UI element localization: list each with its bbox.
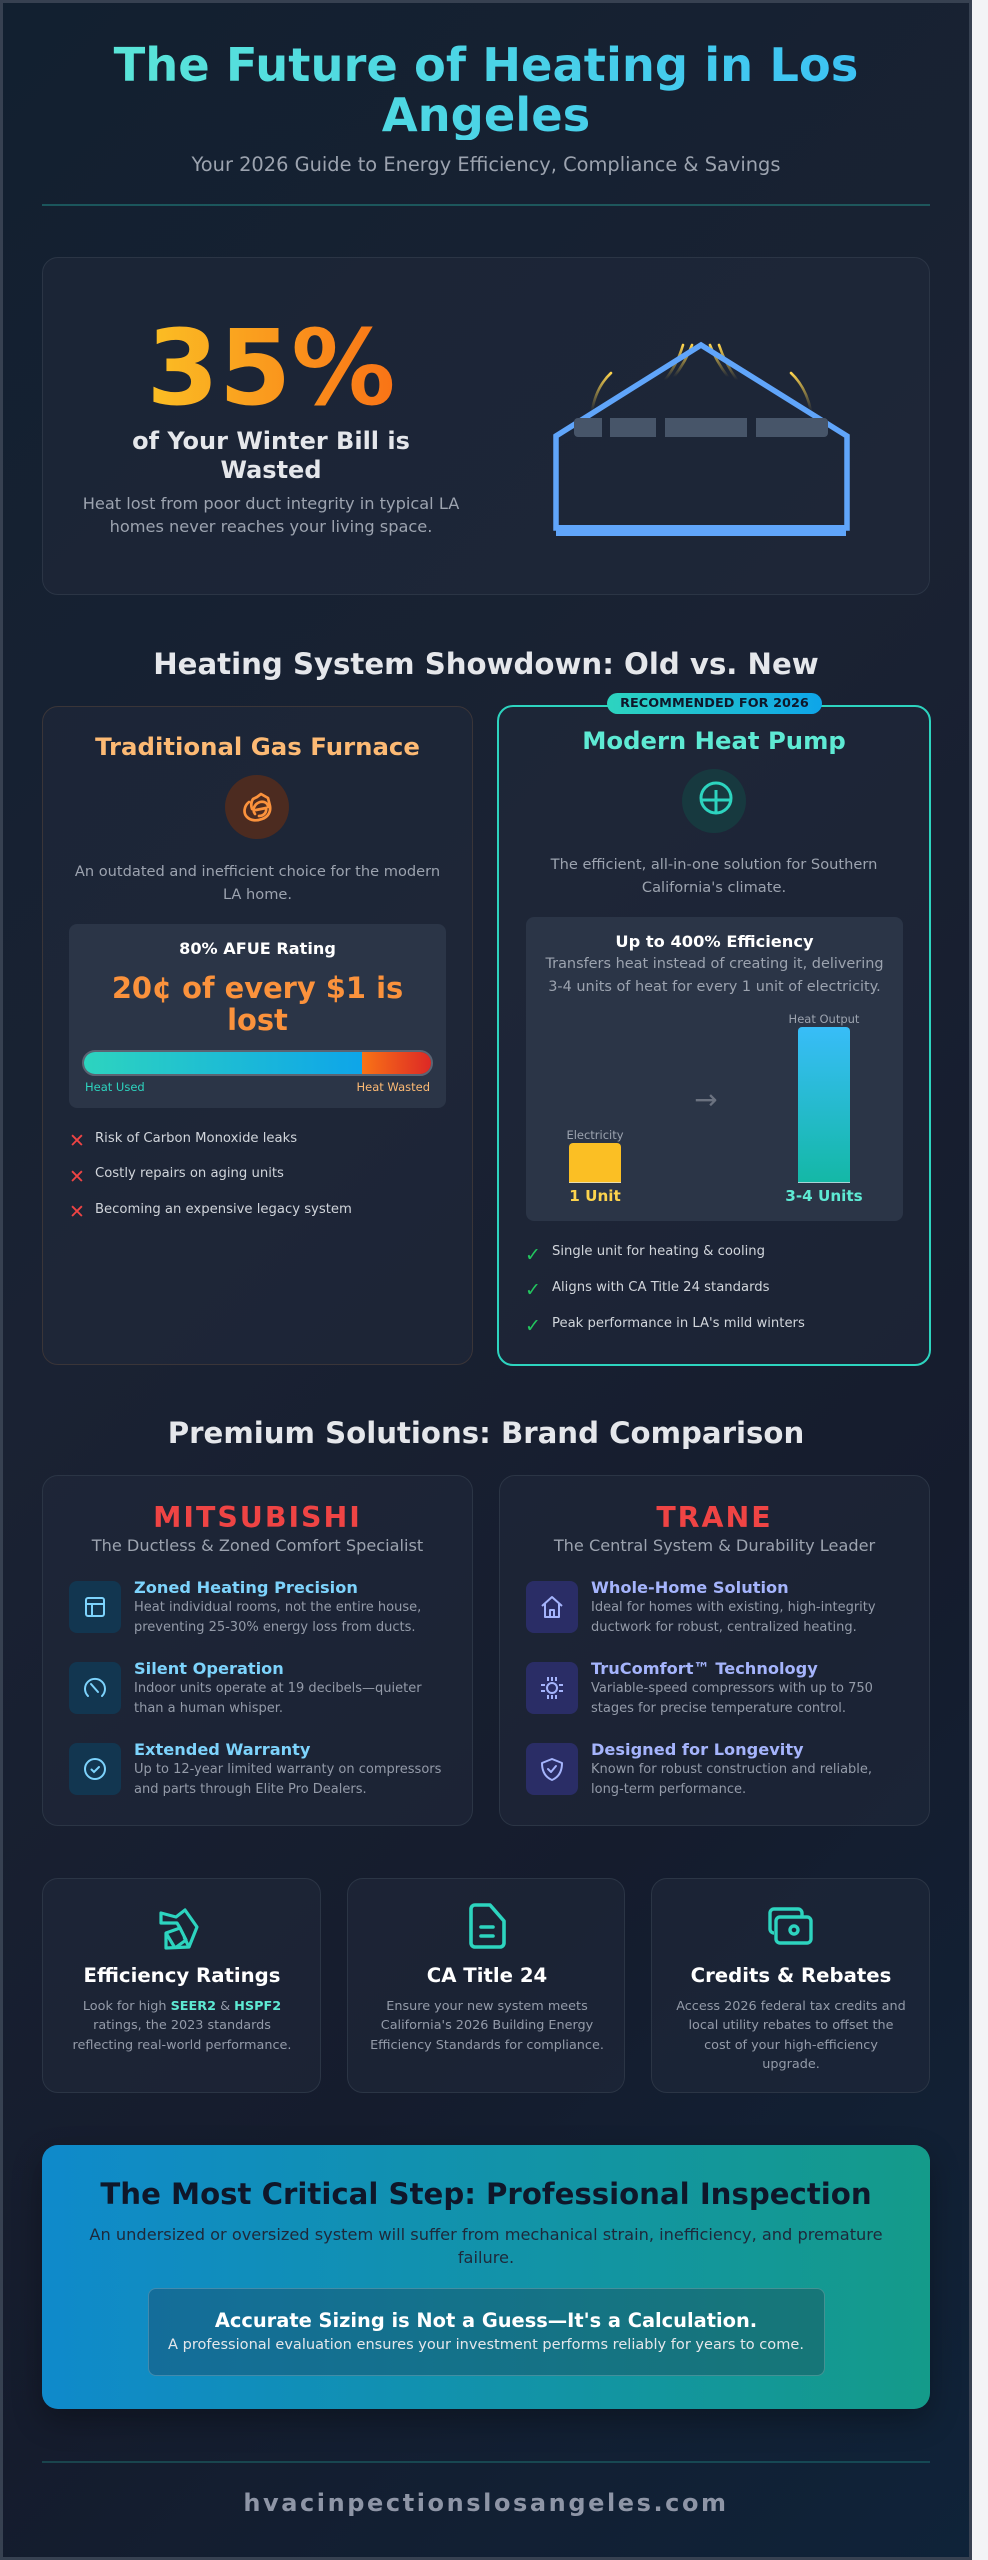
heat wasted segment bbox=[362, 1052, 433, 1074]
bar chart: electricity in vs heat out bbox=[566, 1012, 863, 1205]
drawback 3 text: Becoming an expensive legacy system bbox=[95, 1202, 352, 1216]
feature text bbox=[591, 1600, 876, 1634]
footer URL: hvacinpectionslosangeles.com bbox=[243, 2489, 729, 2517]
feature: extended warranty bbox=[69, 1740, 441, 1796]
loss statement: lost bbox=[227, 1003, 288, 1037]
panel: traditional gas furnace bbox=[42, 706, 473, 1365]
drawback 3: ✕ bbox=[69, 1201, 85, 1223]
feature text: Heat individual rooms, not the entire house, bbox=[134, 1600, 421, 1615]
icon: document bbox=[469, 1903, 506, 1949]
efficiency heading: Up to 400% Efficiency bbox=[615, 932, 814, 951]
electricity bar bbox=[569, 1142, 621, 1182]
brand tagline: The Central System & Durability Leader bbox=[554, 1536, 875, 1555]
feature text: stages for precise temperature control. bbox=[591, 1700, 846, 1716]
feature: TruComfort bbox=[526, 1659, 873, 1716]
panel: modern heat pump bbox=[497, 705, 931, 1366]
feature text: and parts through Elite Pro Dealers. bbox=[134, 1782, 367, 1796]
furnace description bbox=[75, 863, 440, 903]
benefit 2: ✓ bbox=[525, 1279, 541, 1301]
icon: flame bbox=[225, 775, 289, 839]
icon: star ticket bbox=[159, 1908, 199, 1950]
heat output value: 3-4 Units bbox=[785, 1187, 863, 1205]
feature text bbox=[591, 1681, 873, 1716]
furnace description: An outdated and inefficient choice for the modern bbox=[75, 863, 440, 880]
heat pump description: The efficient, all-in-one solution for Southern bbox=[551, 856, 877, 873]
icon: banknotes bbox=[768, 1907, 813, 1945]
card title: CA Title 24 bbox=[427, 1964, 547, 1987]
feature text: Ideal for homes with existing, high-integrity bbox=[591, 1600, 876, 1615]
efficiency panel bbox=[526, 917, 903, 1221]
header bbox=[42, 38, 930, 206]
CTA text: failure. bbox=[458, 2248, 514, 2266]
icon: gauge bbox=[69, 1662, 121, 1714]
footer divider bbox=[42, 2461, 930, 2463]
AFUE label: 80% AFUE Rating bbox=[179, 939, 336, 958]
drawback 2: ✕ bbox=[69, 1166, 85, 1188]
arrow: → bbox=[694, 1083, 718, 1116]
hero description: homes never reaches your living space. bbox=[110, 517, 432, 536]
feature text: ductwork for robust, centralized heating. bbox=[591, 1620, 857, 1634]
feature title: Silent Operation bbox=[134, 1659, 284, 1678]
benefit 3 text: Peak performance in LA's mild winters bbox=[552, 1316, 805, 1330]
brand name: TRANE bbox=[656, 1501, 773, 1534]
title: The Future of Heating in Los bbox=[114, 38, 858, 92]
CTA text: An undersized or oversized system will suffer from mechanical strain, inefficiency, and premature bbox=[89, 2225, 883, 2244]
heat pump description bbox=[550, 856, 877, 896]
header divider bbox=[42, 204, 930, 206]
panel: credits and rebates bbox=[651, 1878, 930, 2093]
card text: Efficiency Standards for compliance. bbox=[370, 2038, 604, 2052]
feature title: Designed for Longevity bbox=[591, 1740, 804, 1759]
subtitle: Your 2026 Guide to Energy Efficiency, Compliance & Savings bbox=[192, 153, 780, 176]
efficiency text: Transfers heat instead of creating it, delivering bbox=[545, 956, 884, 972]
feature: longevity bbox=[526, 1740, 872, 1796]
bar label: heat used: Heat Used bbox=[85, 1080, 145, 1094]
loss statement bbox=[112, 971, 403, 1037]
feature text: long-term performance. bbox=[591, 1782, 746, 1796]
CTA text bbox=[89, 2225, 883, 2266]
card text: Access 2026 federal tax credits and bbox=[676, 1998, 906, 2014]
icon: house bbox=[526, 1581, 578, 1633]
feature title: Extended Warranty bbox=[134, 1740, 310, 1759]
card text: Ensure your new system meets bbox=[386, 1998, 588, 2014]
hero heading bbox=[132, 427, 410, 484]
benefit 3: ✓ bbox=[525, 1315, 541, 1337]
feature text: Up to 12-year limited warranty on compressors bbox=[134, 1762, 441, 1777]
feature: silent operation bbox=[69, 1659, 422, 1716]
heat output label: Heat Output bbox=[789, 1012, 859, 1026]
panel: efficiency ratings bbox=[42, 1878, 321, 2093]
panel: Trane bbox=[499, 1475, 930, 1826]
brand name: MITSUBISHI bbox=[153, 1501, 362, 1534]
loss statement: 20¢ of every $1 is bbox=[112, 971, 403, 1005]
furnace description: LA home. bbox=[223, 886, 292, 903]
card text: reflecting real-world performance. bbox=[73, 2038, 291, 2052]
feature text: Indoor units operate at 19 decibels—quieter bbox=[134, 1681, 422, 1696]
heat pump title: Modern Heat Pump bbox=[582, 726, 846, 755]
heat used segment bbox=[84, 1052, 362, 1074]
panel: hero statistic bbox=[42, 257, 930, 595]
feature text bbox=[134, 1681, 422, 1716]
heat output bar bbox=[798, 1026, 850, 1182]
feature text bbox=[134, 1600, 421, 1634]
heat usage bar bbox=[82, 1050, 433, 1076]
hero description: Heat lost from poor duct integrity in typical LA bbox=[83, 494, 459, 513]
title: Angeles bbox=[382, 88, 590, 142]
badge: recommended: RECOMMENDED FOR 2026 bbox=[620, 696, 809, 710]
feature text: Known for robust construction and reliable, bbox=[591, 1762, 872, 1777]
heat pump description: California's climate. bbox=[642, 879, 786, 896]
feature title: Zoned Heating Precision bbox=[134, 1578, 358, 1597]
card text: ratings, the 2023 standards bbox=[93, 2018, 271, 2033]
feature: whole-home bbox=[526, 1578, 876, 1634]
electricity value: 1 Unit bbox=[569, 1187, 621, 1205]
card text bbox=[73, 1998, 291, 2052]
icon: chip bbox=[526, 1662, 578, 1714]
benefit 1: ✓ bbox=[525, 1244, 541, 1266]
furnace title: Traditional Gas Furnace bbox=[95, 732, 420, 761]
brand tagline: The Ductless & Zoned Comfort Specialist bbox=[92, 1536, 423, 1555]
panel: call to action bbox=[42, 2145, 930, 2409]
card text: Look for high SEER2 & HSPF2 bbox=[83, 1998, 281, 2014]
AFUE panel bbox=[69, 924, 446, 1108]
icon: heat pump symbol bbox=[682, 769, 746, 833]
big number 35%: 35% bbox=[147, 307, 395, 429]
drawback 2 text: Costly repairs on aging units bbox=[95, 1166, 284, 1180]
CTA inner callout bbox=[148, 2288, 824, 2376]
feature: zoned heating bbox=[69, 1578, 421, 1634]
feature text: preventing 25-30% energy loss from ducts. bbox=[134, 1620, 416, 1634]
electricity label: Electricity bbox=[566, 1128, 624, 1142]
drawback 1: ✕ bbox=[69, 1130, 85, 1152]
CTA heading: The Most Critical Step: Professional Inspection bbox=[100, 2177, 872, 2211]
badge: recommended bbox=[607, 692, 822, 714]
benefit 2 text: Aligns with CA Title 24 standards bbox=[552, 1280, 770, 1295]
hero description bbox=[83, 494, 460, 536]
card text: local utility rebates to offset the bbox=[688, 2018, 893, 2033]
icon: check circle bbox=[69, 1743, 121, 1795]
feature text bbox=[591, 1762, 872, 1796]
benefits list bbox=[525, 1244, 805, 1337]
icon: grid bbox=[69, 1581, 121, 1633]
heading: system showdown: Heating System Showdown: Old vs. New bbox=[153, 647, 819, 681]
feature title: TruComfort™ Technology bbox=[591, 1659, 818, 1678]
icon: house with leaking ducts bbox=[553, 342, 850, 536]
heading: brand comparison: Premium Solutions: Brand Comparison bbox=[168, 1416, 804, 1450]
callout heading: Accurate Sizing is Not a Guess—It's a Calculation. bbox=[215, 2309, 757, 2332]
feature text bbox=[134, 1762, 441, 1796]
card text: upgrade. bbox=[762, 2057, 820, 2072]
drawback 1 text: Risk of Carbon Monoxide leaks bbox=[95, 1130, 297, 1146]
panel: CA Title 24 bbox=[347, 1878, 625, 2093]
drawbacks list bbox=[69, 1130, 352, 1223]
icon: shield bbox=[526, 1743, 578, 1795]
hero heading: Wasted bbox=[220, 456, 322, 484]
card title: Efficiency Ratings bbox=[84, 1964, 280, 1987]
title bbox=[0, 40, 972, 140]
card text: cost of your high-efficiency bbox=[704, 2038, 878, 2052]
efficiency text bbox=[545, 956, 884, 994]
benefit 1 text: Single unit for heating & cooling bbox=[552, 1244, 765, 1259]
callout text: A professional evaluation ensures your investment performs reliably for years to come. bbox=[168, 2336, 804, 2353]
card text bbox=[370, 1998, 604, 2052]
hero heading: of Your Winter Bill is bbox=[132, 427, 410, 455]
feature title: Whole-Home Solution bbox=[591, 1578, 789, 1597]
feature text: Variable-speed compressors with up to 750 bbox=[591, 1681, 873, 1696]
bar label: heat wasted: Heat Wasted bbox=[356, 1080, 430, 1094]
card text: California's 2026 Building Energy bbox=[381, 2018, 593, 2033]
efficiency text: 3-4 units of heat for every 1 unit of electricity. bbox=[548, 978, 881, 994]
panel: Mitsubishi bbox=[42, 1475, 473, 1826]
card text bbox=[676, 1998, 906, 2072]
card title: Credits & Rebates bbox=[691, 1964, 891, 1987]
feature text: than a human whisper. bbox=[134, 1700, 283, 1716]
